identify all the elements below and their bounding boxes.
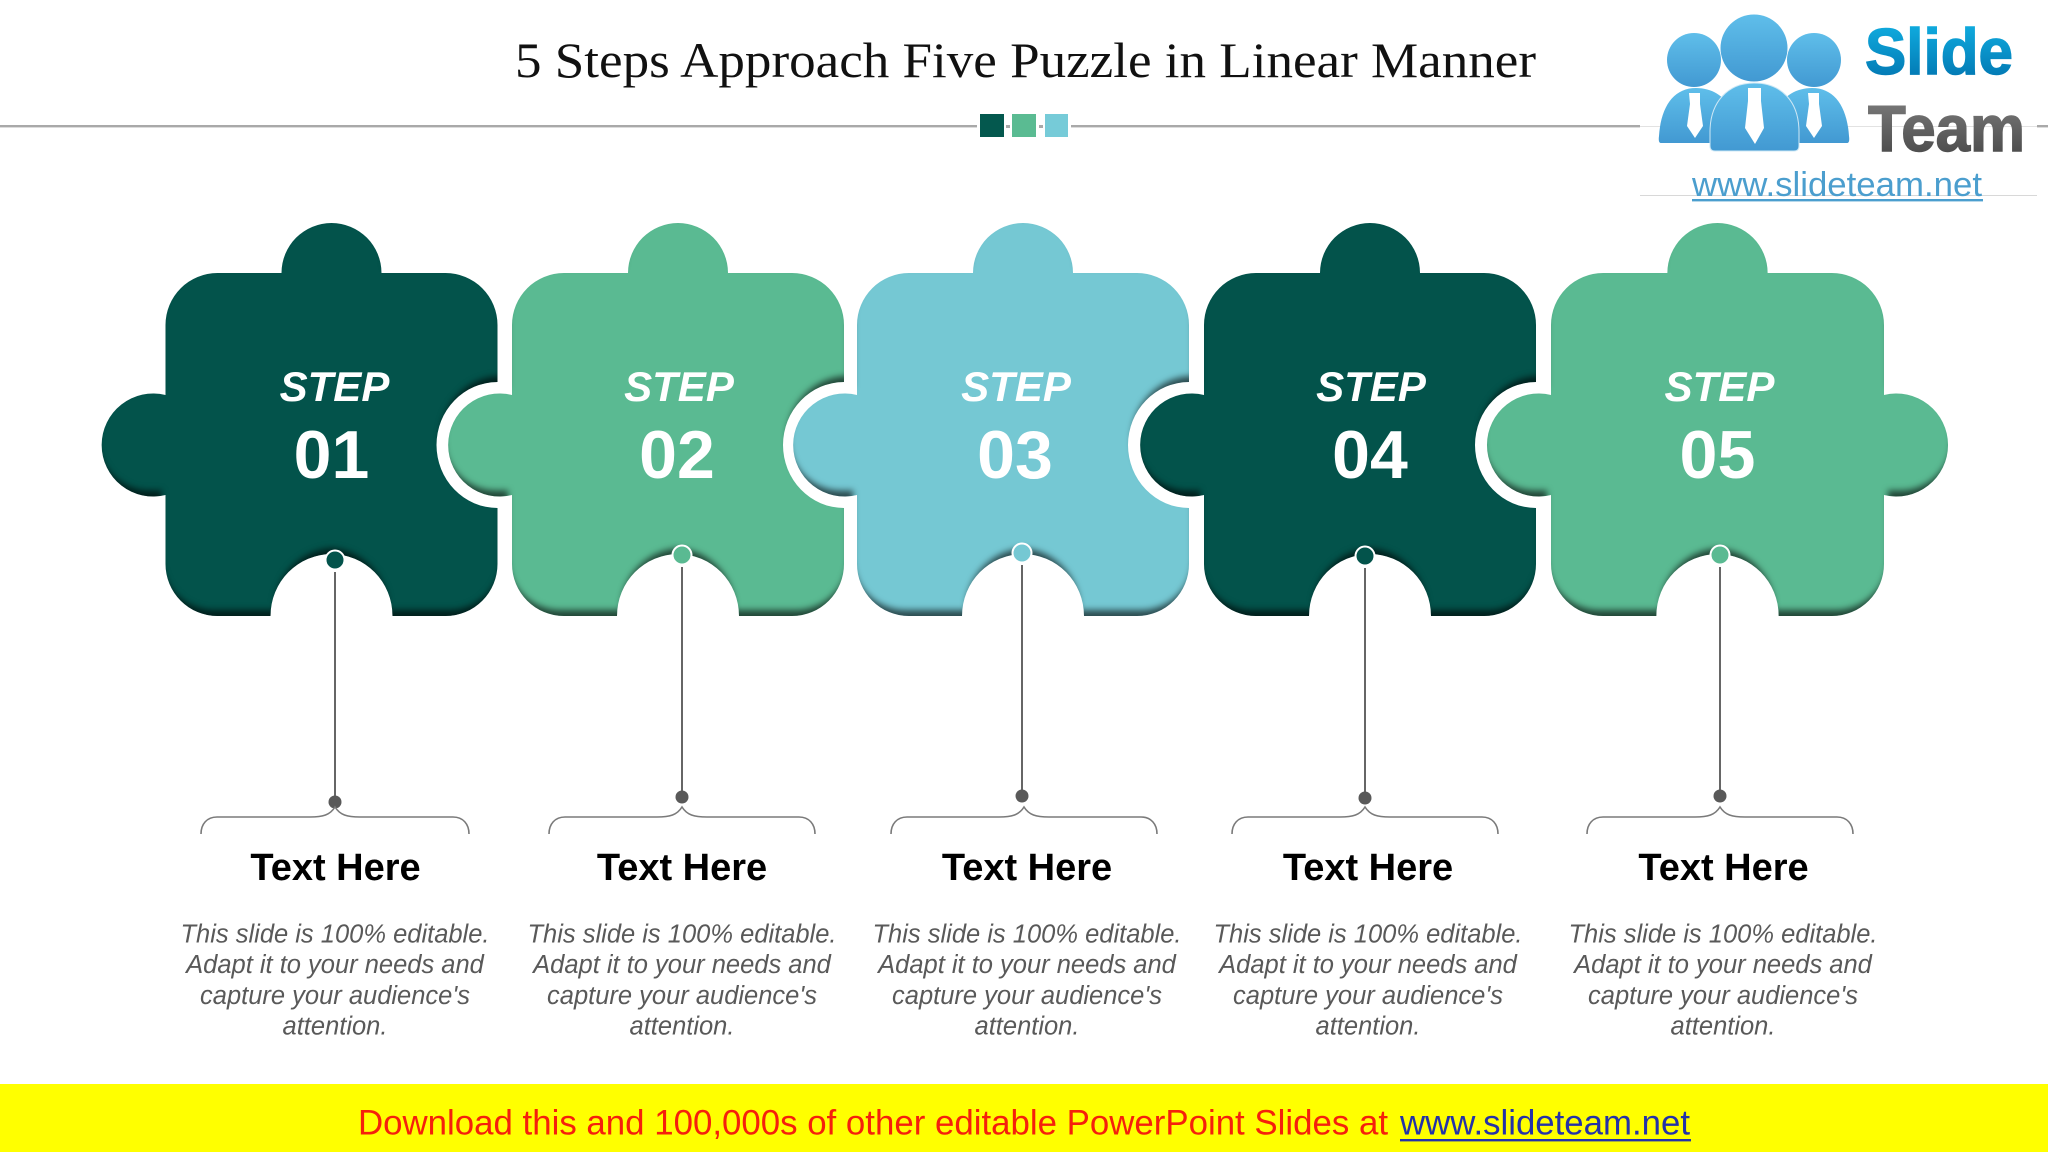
text block 2: This slide is 100% editable. — [527, 920, 837, 948]
step label 03: STEP — [961, 363, 1072, 410]
download banner — [0, 1084, 2048, 1152]
puzzle piece 5 — [1487, 223, 1948, 616]
text block 1: attention. — [283, 1012, 387, 1040]
step label 01: STEP — [280, 363, 390, 410]
text block 5: This slide is 100% editable. — [1568, 920, 1878, 948]
connector 4 — [1232, 546, 1498, 834]
connector 3 — [891, 544, 1157, 834]
text block 3: This slide is 100% editable. — [872, 920, 1182, 948]
logo url: www.slideteam.net — [1691, 166, 1982, 204]
text block 1 — [180, 847, 490, 1040]
text block 2: capture your audience's — [547, 982, 817, 1010]
step label 05 — [1665, 363, 1775, 493]
text block 5: attention. — [1671, 1012, 1775, 1040]
banner link: www.slideteam.net — [1399, 1104, 1690, 1142]
puzzle piece 2 — [448, 223, 844, 616]
step label 04: 04 — [1332, 417, 1408, 493]
puzzle piece 3 — [793, 223, 1189, 616]
text block 5: capture your audience's — [1588, 982, 1858, 1010]
logo wordmark: Slide — [1865, 15, 2013, 88]
step label 04: STEP — [1316, 363, 1427, 410]
text block 4: attention. — [1316, 1012, 1420, 1040]
text block 2: attention. — [630, 1012, 734, 1040]
text block 1: Adapt it to your needs and — [184, 951, 485, 979]
puzzle piece 4 — [1140, 223, 1536, 616]
step label 03 — [961, 363, 1072, 493]
connector 2 — [549, 546, 815, 834]
step label 05: STEP — [1665, 363, 1775, 410]
puzzle piece 1 — [102, 223, 498, 616]
text block 4: Adapt it to your needs and — [1217, 951, 1518, 979]
text block 1: Text Here — [250, 847, 421, 889]
text block 3: capture your audience's — [892, 982, 1162, 1010]
text block 4: Text Here — [1283, 847, 1453, 889]
text block 4: capture your audience's — [1233, 982, 1503, 1010]
text block 1: This slide is 100% editable. — [180, 920, 490, 948]
step label 04 — [1316, 363, 1427, 493]
text block 3 — [872, 847, 1182, 1040]
logo: SlideTeam: Team — [1868, 92, 2025, 165]
text block 5: Adapt it to your needs and — [1572, 951, 1873, 979]
text block 3: attention. — [975, 1012, 1079, 1040]
text block 3: Adapt it to your needs and — [876, 951, 1177, 979]
text block 2 — [527, 847, 837, 1040]
step label 02: STEP — [624, 363, 735, 410]
banner text: Download this and 100,000s of other editable PowerPoint Slides at — [358, 1104, 1388, 1142]
step label 05: 05 — [1680, 417, 1755, 493]
step label 01 — [280, 363, 390, 493]
text block 4 — [1213, 847, 1523, 1040]
step label 02: 02 — [639, 417, 715, 493]
connector 5 — [1587, 546, 1853, 834]
connector 1 — [201, 550, 469, 834]
text block 5 — [1568, 847, 1878, 1040]
text block 1: capture your audience's — [200, 982, 470, 1010]
text block 2: Adapt it to your needs and — [531, 951, 832, 979]
text block 3: Text Here — [942, 847, 1112, 889]
logo: SlideTeam — [1640, 14, 2037, 204]
text block 2: Text Here — [597, 847, 767, 889]
text block 4: This slide is 100% editable. — [1213, 920, 1523, 948]
step label 01: 01 — [294, 417, 369, 493]
header rule — [0, 125, 2048, 128]
title: 5 Steps Approach Five Puzzle in Linear Manner — [515, 32, 1536, 88]
title accent squares — [980, 114, 1068, 137]
text block 5: Text Here — [1638, 847, 1809, 889]
logo icon: three people — [1659, 14, 1849, 151]
step label 03: 03 — [977, 417, 1053, 493]
step label 02 — [624, 363, 735, 493]
